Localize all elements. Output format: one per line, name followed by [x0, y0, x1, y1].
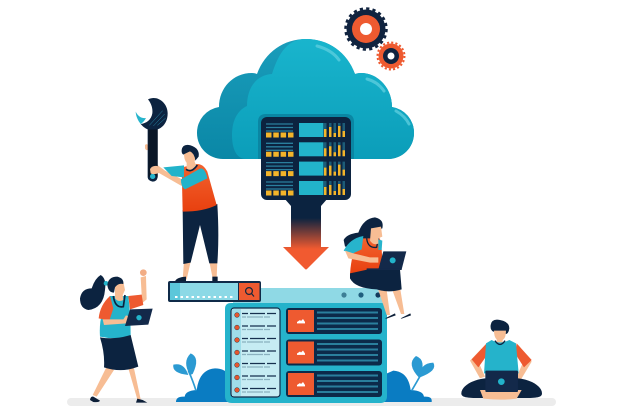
skirt [100, 335, 138, 370]
trousers [183, 204, 218, 264]
icon: left bush and leaves [173, 353, 232, 402]
icon: magnifier [246, 288, 254, 296]
rack row 3 [266, 162, 345, 176]
arrow: download into server window [283, 198, 329, 270]
feet [480, 390, 522, 400]
window top bar [233, 288, 387, 306]
search bar [168, 281, 261, 302]
icon: small gear [378, 42, 404, 70]
shoes [175, 277, 218, 281]
person: man seated cross-legged [461, 320, 542, 400]
hair back [344, 217, 383, 247]
legs [378, 287, 404, 315]
icon: laptop [367, 251, 406, 270]
icon: laptop [485, 371, 518, 392]
content card 1 [286, 308, 382, 334]
raised arm [128, 276, 147, 307]
shoes [90, 397, 147, 403]
list panel [231, 308, 280, 397]
hair [491, 320, 509, 334]
window body [225, 303, 387, 403]
rack row 2 [266, 142, 345, 157]
person: woman seated on server [344, 217, 411, 319]
icon: cloud [197, 39, 414, 159]
torso [182, 164, 217, 212]
ground shadow [67, 398, 556, 406]
torso [100, 296, 131, 338]
arm [345, 251, 378, 263]
crossed legs [461, 378, 542, 398]
head [370, 227, 382, 244]
shoes [385, 313, 411, 319]
icon: large gear [346, 8, 386, 50]
content card 3 [286, 371, 382, 397]
torso [350, 238, 382, 274]
person: man holding wrench [136, 98, 218, 281]
legs [183, 262, 217, 279]
head [115, 282, 125, 301]
hair ponytail [80, 275, 105, 310]
status dots [341, 292, 381, 298]
wrench [136, 98, 168, 182]
icon: right bush and leaves [383, 356, 434, 402]
icon: laptop [125, 309, 153, 326]
teal sleeves [163, 165, 184, 177]
content card 2 [286, 340, 382, 366]
torso [484, 340, 519, 373]
arm and hand [151, 164, 183, 186]
sleeves [344, 236, 363, 254]
sleeves [472, 343, 488, 367]
person: woman with laptop standing [80, 269, 153, 403]
head and neck [494, 331, 506, 343]
rack row 4 [266, 181, 345, 196]
panel: server window [225, 288, 387, 403]
neck and head [187, 160, 197, 170]
panel: cloud server rack [258, 114, 354, 200]
skirt [350, 269, 402, 291]
legs [93, 367, 141, 399]
arms [470, 343, 487, 378]
rack row 1 [266, 123, 345, 138]
sleeve and arm [99, 296, 113, 321]
